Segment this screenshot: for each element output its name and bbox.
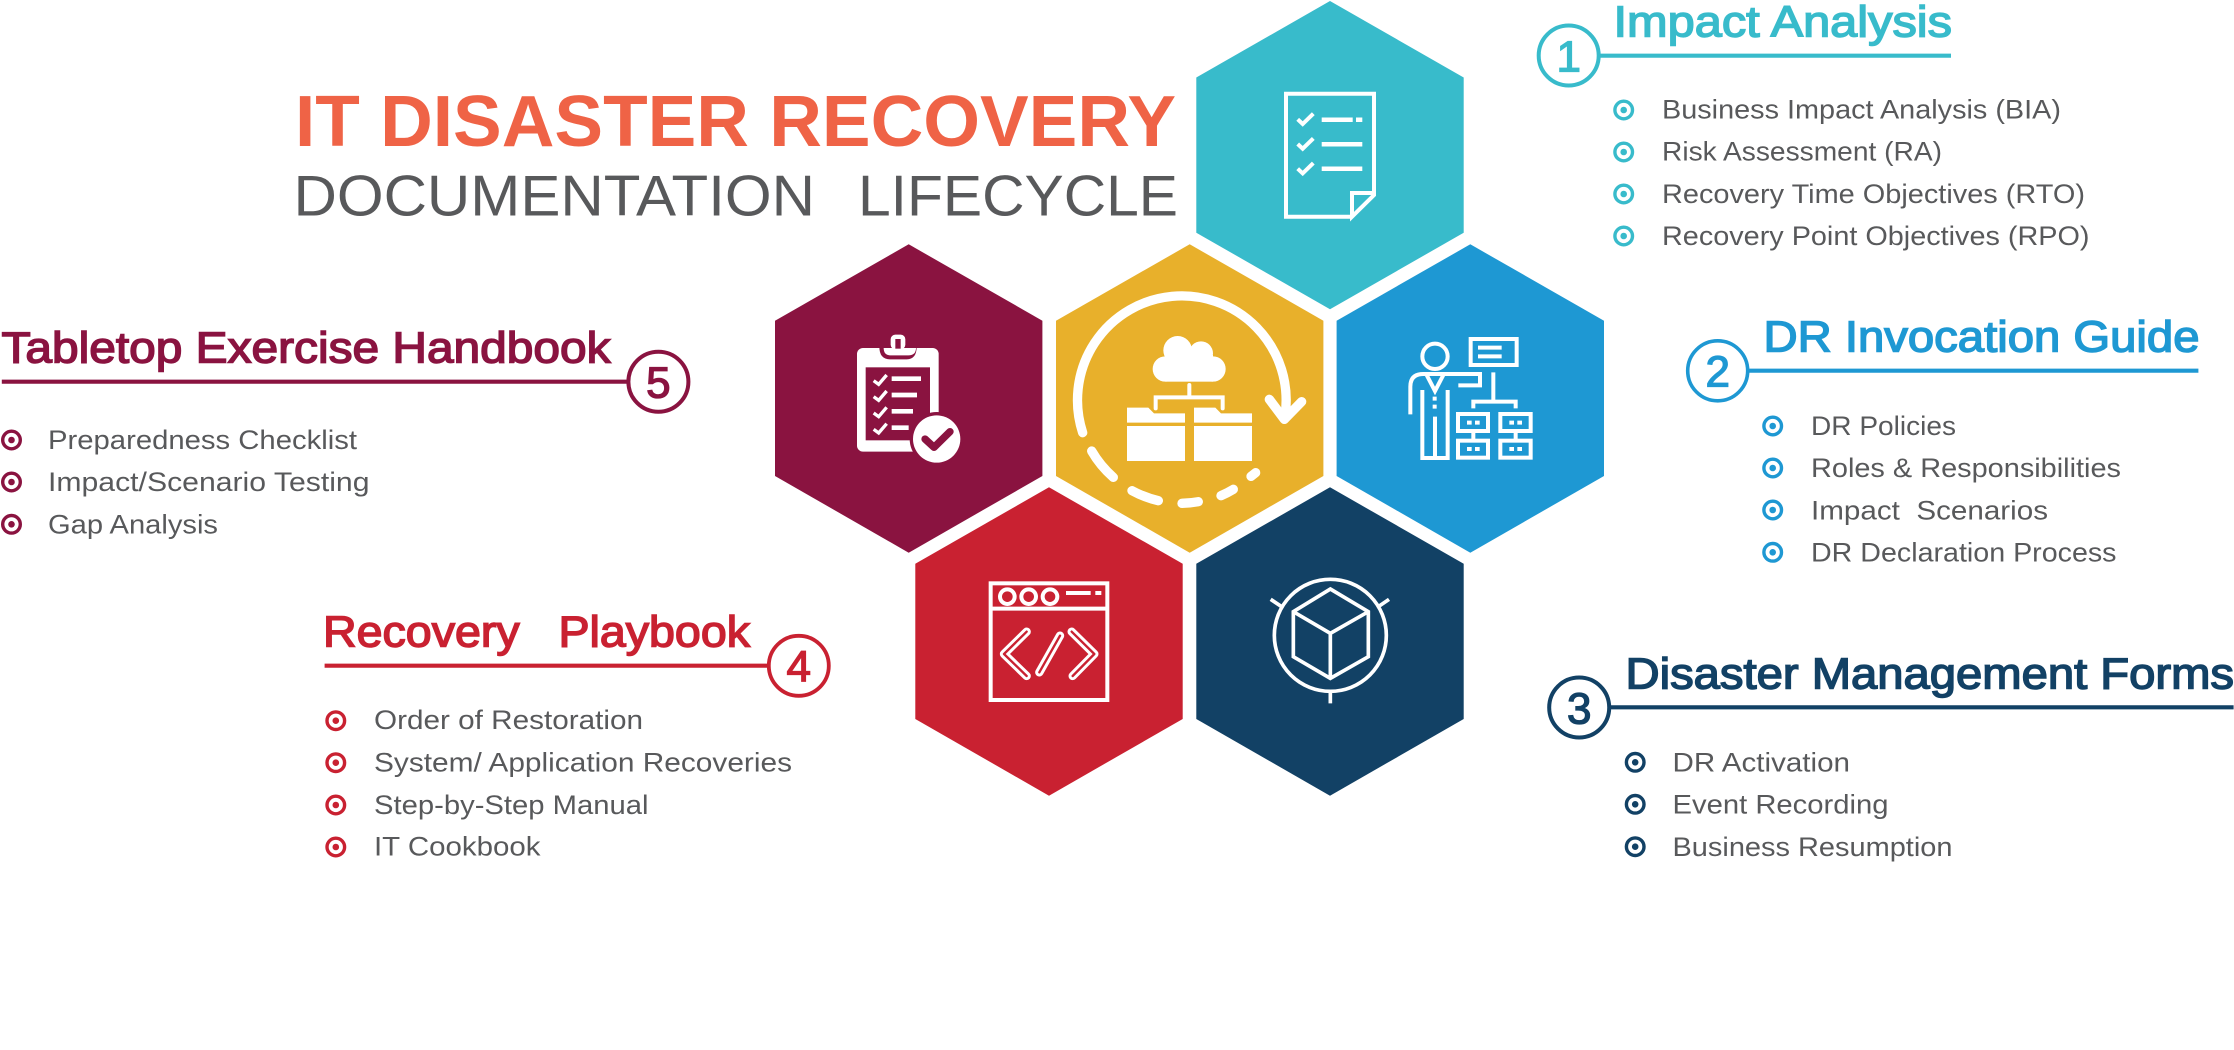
bullet list: Recovery Point Objectives (RPO) — [1662, 221, 2090, 251]
number badge — [1549, 678, 1609, 738]
icon: cloud folders with cycle arrow — [1077, 296, 1302, 503]
hexagon: central lifecycle — [1056, 244, 1323, 553]
number badge: 3 — [1567, 684, 1591, 733]
bullet list: System/ Application Recoveries — [374, 747, 792, 777]
bullet list: DR Declaration Process — [1811, 538, 2116, 568]
bullet list — [1615, 95, 2090, 251]
bullet list: Risk Assessment (RA) — [1662, 137, 1942, 167]
bullet list — [1764, 411, 2121, 568]
bullet list: Event Recording — [1672, 789, 1888, 819]
number badge: 1 — [1556, 33, 1581, 82]
number badge: 4 — [787, 643, 811, 692]
hexagon: tabletop exercise — [775, 244, 1042, 553]
heading rule — [1749, 369, 2198, 373]
bullet list: Order of Restoration — [374, 705, 643, 735]
icon: clipboard with check badge — [857, 335, 964, 466]
number badge — [628, 352, 688, 412]
icon: cube in circle — [1271, 579, 1389, 703]
panel: disaster management forms — [1549, 649, 2234, 862]
title line 2: LIFECYCLE — [858, 165, 1178, 229]
panel: tabletop exercise handbook — [2, 324, 688, 539]
panel: recovery playbook — [323, 608, 829, 862]
bullet list — [3, 425, 369, 539]
heading: DR Invocation Guide — [1764, 313, 2200, 362]
number badge — [769, 636, 829, 696]
title line 1: IT DISASTER RECOVERY — [295, 81, 1176, 162]
hexagon: recovery playbook — [915, 487, 1183, 796]
number badge: 5 — [646, 359, 671, 408]
panel: impact analysis — [1539, 0, 2090, 251]
icon: presenter with org chart — [1410, 339, 1531, 458]
number badge: 2 — [1705, 348, 1730, 397]
heading: Disaster Management Forms — [1626, 649, 2234, 698]
title — [294, 81, 1178, 229]
title line 2 — [294, 165, 1178, 229]
bullet list: Business Impact Analysis (BIA) — [1662, 95, 2061, 125]
bullet list: Gap Analysis — [48, 509, 218, 539]
bullet list: Impact Scenarios — [1811, 496, 2048, 526]
icon: checklist document — [1286, 94, 1374, 217]
bullet list: Recovery Time Objectives (RTO) — [1662, 179, 2085, 209]
hexagon: impact analysis — [1196, 1, 1464, 309]
hexagon: disaster management forms — [1196, 487, 1464, 796]
heading rule — [1611, 705, 2234, 709]
bullet list: Business Resumption — [1672, 832, 1952, 862]
bullet list: DR Policies — [1811, 411, 1956, 441]
bullet list: Preparedness Checklist — [48, 425, 358, 455]
bullet list: DR Activation — [1672, 748, 1850, 778]
heading rule — [2, 380, 627, 384]
heading: Tabletop Exercise Handbook — [2, 324, 612, 373]
icon: code window — [991, 583, 1107, 700]
bullet list: Step-by-Step Manual — [374, 790, 648, 820]
bullet list — [1626, 748, 1952, 862]
heading: Recovery Playbook — [323, 608, 751, 657]
hexagon: DR invocation — [1337, 244, 1604, 553]
number badge — [1539, 26, 1599, 86]
bullet list — [327, 705, 792, 862]
bullet list: Roles & Responsibilities — [1811, 453, 2121, 483]
heading rule — [325, 664, 767, 668]
number badge — [1688, 341, 1748, 401]
panel: DR invocation guide — [1688, 313, 2200, 568]
bullet list: Impact/Scenario Testing — [48, 467, 370, 497]
bullet list: IT Cookbook — [374, 832, 541, 862]
heading rule — [1600, 54, 1951, 58]
title line 2: DOCUMENTATION — [294, 165, 815, 229]
